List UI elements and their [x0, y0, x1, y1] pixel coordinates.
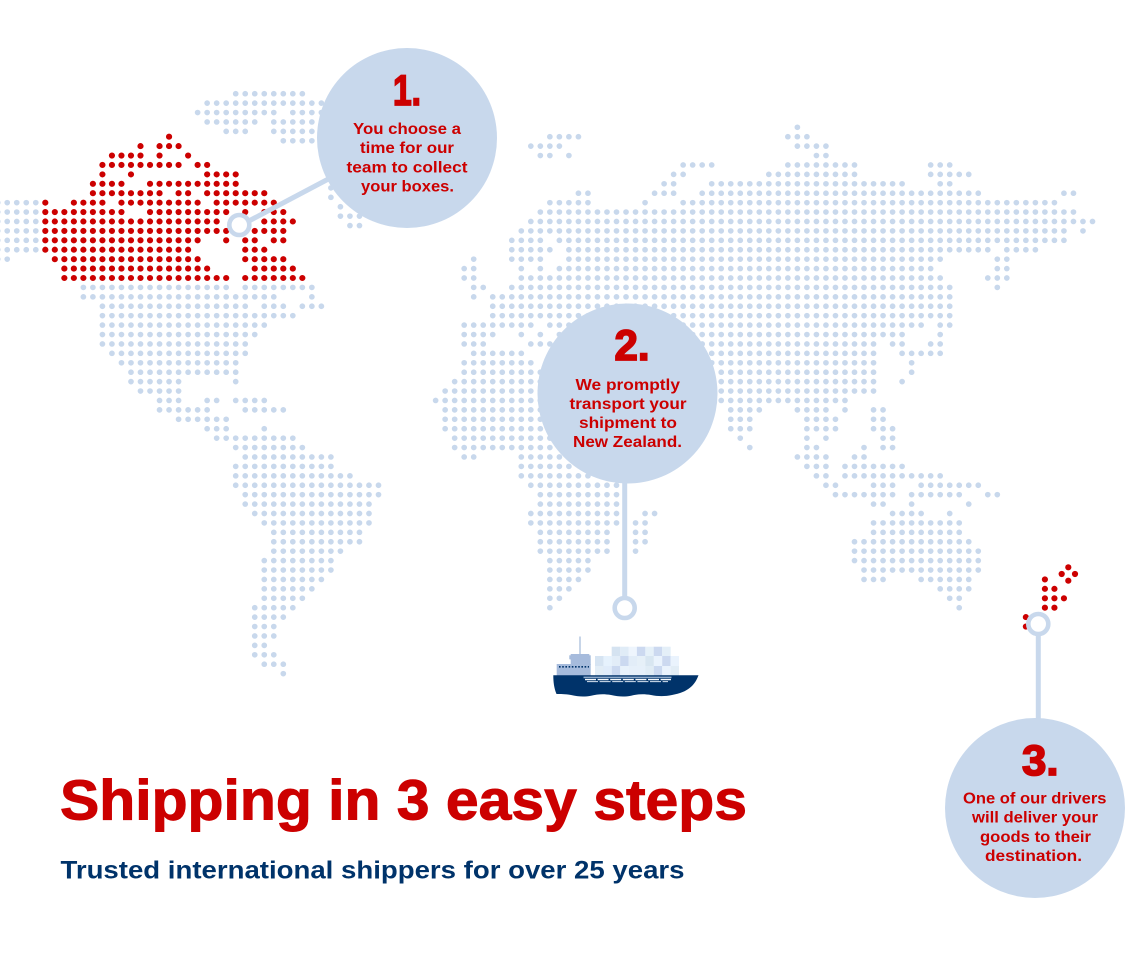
ship hull: [553, 675, 698, 696]
step 3 number: 3.: [1022, 737, 1058, 785]
ship superstructure: [557, 636, 591, 676]
step 1 description: your boxes.: [361, 178, 454, 196]
step 2 description: [570, 377, 686, 451]
step 1 number: 1.: [393, 67, 421, 115]
step 3 connector and location ring: [1028, 614, 1048, 725]
step 1 description: time for our: [360, 140, 454, 157]
step 3 callout: [945, 718, 1125, 898]
map: light dots for the Americas, Europe, Africa, Asia and Australia: [0, 127, 1093, 674]
step 1 description: team to collect: [346, 160, 468, 176]
step 2 connector and location ring: [615, 478, 635, 618]
step 2 description: New Zealand.: [573, 434, 682, 451]
step 3 description: will deliver your: [971, 810, 1098, 826]
ship hull stripes: [584, 677, 672, 682]
title: Shipping in 3 easy steps: [60, 768, 747, 832]
step 2 callout: [538, 304, 718, 484]
step 1 description: You choose a: [353, 121, 461, 138]
step 3 description: [963, 790, 1107, 865]
ship containers: [595, 647, 679, 676]
subtitle: Trusted international shippers for over 25 years: [60, 856, 684, 884]
icon: container ship: [553, 636, 698, 696]
step 1 callout: [317, 48, 497, 228]
map: west Alaska and north-east islands: [198, 94, 360, 226]
map: Canada highlighted in red: [45, 137, 302, 278]
step 2 description: transport your: [570, 396, 686, 413]
step 2 description: shipment to: [579, 415, 677, 432]
step 2 description: We promptly: [576, 377, 680, 394]
step 3 description: goods to their: [980, 829, 1091, 846]
step 3 description: One of our drivers: [963, 790, 1107, 808]
step 2 number: 2.: [614, 322, 650, 370]
step 1 description: [346, 121, 468, 196]
dotted world map: [0, 94, 1093, 674]
map: New Zealand highlighted in red: [1026, 564, 1078, 627]
step 3 description: destination.: [985, 848, 1082, 865]
step 1 connector and location ring: [229, 176, 335, 235]
